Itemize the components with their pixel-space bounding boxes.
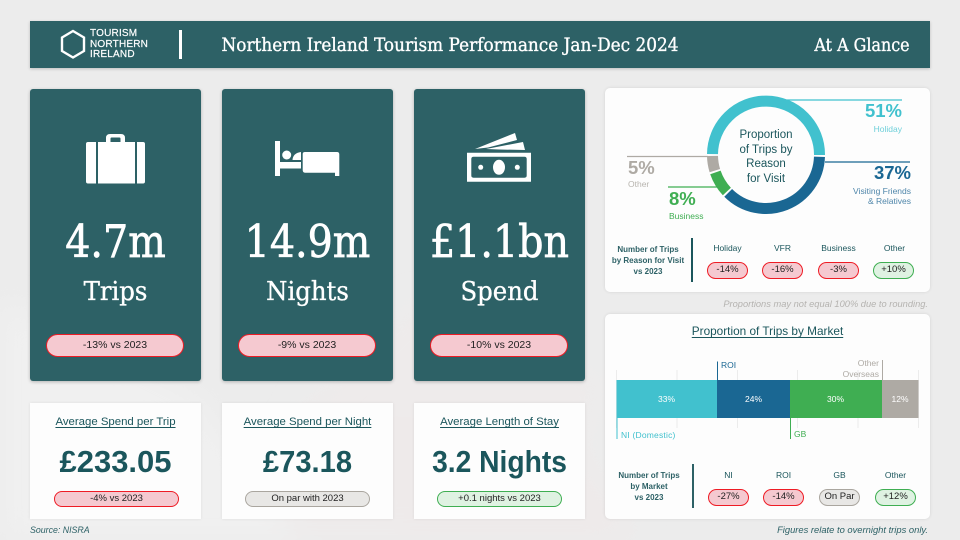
other change: +12% xyxy=(883,491,908,502)
holiday segment xyxy=(712,101,820,155)
gb segment xyxy=(790,380,882,418)
donut centre label: of Trips by xyxy=(739,144,793,156)
label: Spend xyxy=(460,276,539,307)
panel: average spend per night xyxy=(222,403,393,519)
series labels: NI (Domestic) xyxy=(621,430,676,440)
change pill xyxy=(245,491,370,507)
comparison heading xyxy=(612,245,684,276)
other change xyxy=(873,262,914,279)
other label: Other xyxy=(628,179,649,189)
at a glance label: At A Glance xyxy=(814,36,910,56)
comparison heading: by Reason for Visit xyxy=(612,256,684,265)
panel: average length of stay xyxy=(414,403,585,519)
other column label: Other xyxy=(885,470,906,480)
ni change xyxy=(708,489,749,506)
change pill xyxy=(430,334,568,357)
series labels xyxy=(621,358,879,440)
panel: trips xyxy=(30,89,201,381)
heading: Average Spend per Trip xyxy=(55,416,176,428)
donut centre label xyxy=(739,129,793,184)
bar labels: 33% xyxy=(658,394,675,404)
holiday change xyxy=(707,262,748,279)
icon: bed xyxy=(275,141,340,176)
business label: Business xyxy=(669,211,704,221)
panel: spend xyxy=(414,89,585,381)
donut centre label: for Visit xyxy=(747,172,785,184)
logo wordmark xyxy=(90,28,148,60)
vfr change xyxy=(762,262,803,279)
icon: suitcase xyxy=(86,134,145,184)
other column label: Other xyxy=(884,243,905,253)
change pill: -10% vs 2023 xyxy=(467,339,531,351)
business column label: Business xyxy=(821,243,856,253)
stacked bar chart xyxy=(616,358,919,440)
panel: market xyxy=(605,314,930,519)
bar labels xyxy=(658,394,909,404)
header bar xyxy=(30,21,930,68)
change pill: On par with 2023 xyxy=(271,493,344,504)
series labels: GB xyxy=(794,429,807,439)
change pill xyxy=(54,491,179,507)
label: Trips xyxy=(84,276,147,307)
rounding note: Proportions may not equal 100% due to rounding. xyxy=(723,299,928,309)
logo: hexagon xyxy=(60,30,86,59)
leader lines xyxy=(617,360,882,439)
vfr change: -16% xyxy=(771,264,794,275)
other overseas segment xyxy=(882,380,918,418)
donut centre label: Reason xyxy=(746,158,786,170)
icon: banknotes xyxy=(467,133,531,182)
business value: 8% xyxy=(669,188,696,209)
panel: average spend per trip xyxy=(30,403,201,519)
holiday column label: Holiday xyxy=(713,243,742,253)
comparison heading xyxy=(618,471,680,502)
leader lines xyxy=(627,100,910,187)
logo wordmark: TOURISM xyxy=(90,28,137,39)
bar labels: 24% xyxy=(745,394,762,404)
overnight note: Figures relate to overnight trips only. xyxy=(777,524,928,535)
other value: 5% xyxy=(628,157,655,178)
panel: reason for visit xyxy=(605,88,930,292)
change pill xyxy=(46,334,184,357)
logo wordmark: NORTHERN xyxy=(90,38,148,50)
ni change: -27% xyxy=(717,491,740,502)
holiday label: Holiday xyxy=(874,124,902,134)
value: 14.9m xyxy=(245,215,370,268)
bar labels: 12% xyxy=(891,394,909,404)
series labels: ROI xyxy=(721,360,736,370)
change pill: -4% vs 2023 xyxy=(90,493,143,504)
value: 3.2 Nights xyxy=(432,444,567,479)
source note: Source: NISRA xyxy=(30,525,90,535)
ni segment xyxy=(616,380,717,418)
holiday value: 51% xyxy=(865,100,902,121)
heading: Average Length of Stay xyxy=(440,416,559,428)
vfr label: Visiting Friends xyxy=(853,186,911,196)
comparison divider xyxy=(692,464,694,508)
change pill: -13% vs 2023 xyxy=(83,339,147,351)
series labels: Overseas xyxy=(843,369,879,379)
comparison heading: by Market xyxy=(630,482,668,491)
vfr segment xyxy=(728,157,819,209)
other change xyxy=(875,489,916,506)
roi segment xyxy=(717,380,790,418)
other change: +10% xyxy=(881,264,906,275)
holiday change: -14% xyxy=(716,264,739,275)
comparison divider xyxy=(691,238,692,282)
other segment xyxy=(712,156,715,171)
comparison heading: vs 2023 xyxy=(635,493,663,502)
gb change: On Par xyxy=(824,491,855,502)
change pill: +0.1 nights vs 2023 xyxy=(458,493,541,504)
label: Nights xyxy=(266,276,349,307)
business segment xyxy=(715,172,727,191)
panel: nights xyxy=(222,89,393,381)
bar labels: 30% xyxy=(827,394,844,404)
value: £1.1bn xyxy=(430,215,569,268)
series labels: Other xyxy=(858,358,879,368)
donut centre label: Proportion xyxy=(739,129,793,141)
logo divider xyxy=(179,30,182,59)
gb column label: GB xyxy=(833,470,846,480)
roi change xyxy=(763,489,804,506)
comparison heading: Number of Trips xyxy=(618,471,680,480)
vfr label xyxy=(853,186,911,206)
vfr column label: VFR xyxy=(774,243,791,253)
roi column label: ROI xyxy=(776,470,791,480)
vfr label: & Relatives xyxy=(868,196,911,206)
business change: -3% xyxy=(830,264,847,275)
grid lines xyxy=(616,370,918,428)
ni column label: NI xyxy=(724,470,733,480)
roi change: -14% xyxy=(772,491,795,502)
heading: Average Spend per Night xyxy=(244,416,371,428)
title: Northern Ireland Tourism Performance Jan-Dec 2024 xyxy=(222,35,679,56)
value: £73.18 xyxy=(263,444,352,479)
change pill: -9% vs 2023 xyxy=(278,339,336,351)
donut chart xyxy=(627,96,910,214)
vfr value: 37% xyxy=(874,162,911,183)
gb change xyxy=(819,489,860,506)
business change xyxy=(818,262,859,279)
logo wordmark: IRELAND xyxy=(90,49,135,60)
value: 4.7m xyxy=(65,215,166,268)
heading: Proportion of Trips by Market xyxy=(692,324,843,338)
change pill xyxy=(238,334,376,357)
comparison heading: Number of Trips xyxy=(617,245,679,254)
value: £233.05 xyxy=(59,444,172,479)
comparison heading: vs 2023 xyxy=(634,267,662,276)
change pill xyxy=(437,491,562,507)
